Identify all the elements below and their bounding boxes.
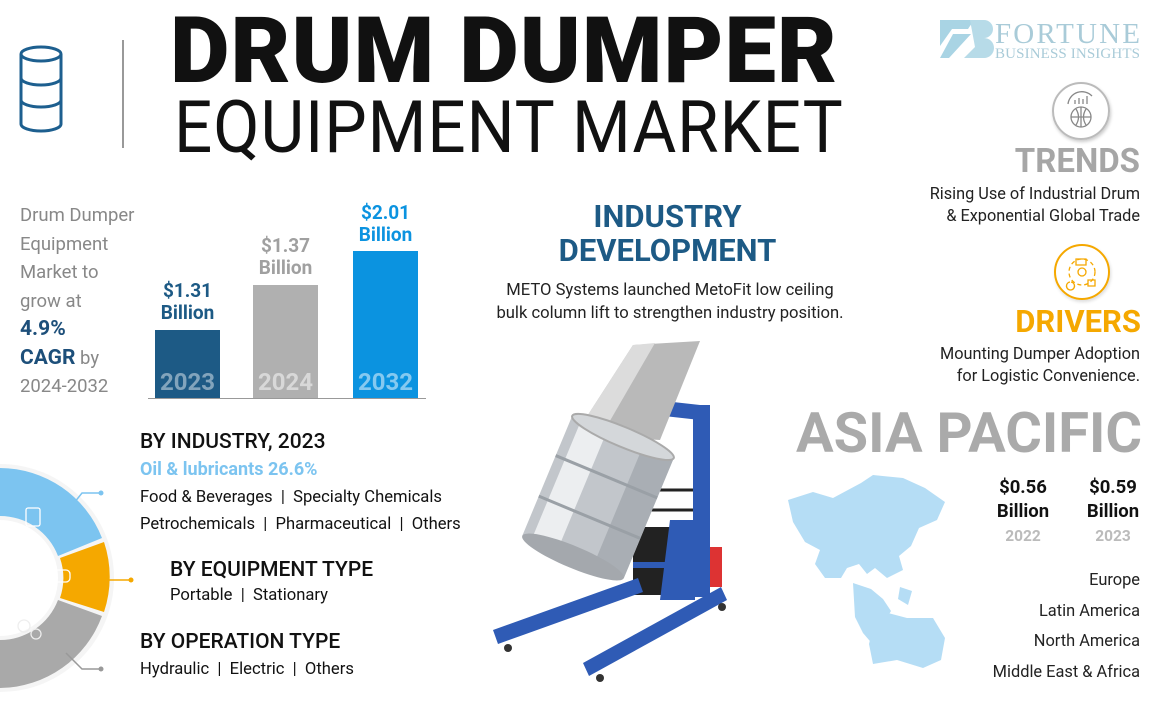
text: CAGR: 2024-2032 [20,375,108,397]
logo [940,18,1140,62]
text: drivers: Mounting Dumper Adoption [940,344,1140,363]
bar chart: 2023 [160,368,215,396]
text: drivers: for Logistic Convenience. [957,366,1140,385]
segment: by operation type: BY OPERATION TYPE [140,630,340,654]
text: CAGR: CAGR by [20,346,99,370]
region list: North America [1034,632,1140,651]
icon: drivers [1054,244,1110,300]
segment: by equipment type: Portable | Stationary [170,586,328,605]
text: industry development: METO Systems launched MetoFit low ceiling [506,281,834,300]
region list: Latin America [1039,602,1140,620]
bar chart: Billion [161,301,214,324]
text: CAGR: Equipment [20,232,108,254]
title: DRUM DUMPER [170,0,838,105]
region list: Europe [1089,571,1140,590]
title [170,0,844,170]
icon: drum [20,46,62,132]
stat: 2023 [1087,476,1139,545]
heading: asia pacific: ASIA PACIFIC [796,400,1142,466]
stat: 2023: $0.59 [1089,476,1137,498]
heading: drivers: DRIVERS [1015,303,1141,340]
image: drum dumper [493,341,727,682]
map: asia pacific [788,475,945,668]
bar chart: $1.31 [163,279,212,302]
title: EQUIPMENT MARKET [174,85,844,170]
stat: 2022: Billion [997,500,1049,522]
segment: by industry: Oil & lubricants 26.6% [140,459,317,480]
text: CAGR [20,204,134,397]
stat: 2022 [997,476,1049,545]
text: CAGR: Drum Dumper [20,204,134,226]
bar chart: 2032 [358,368,413,396]
heading: trends: TRENDS [1015,142,1140,181]
text: industry development: bulk column lift to strengthen industry position. [496,304,844,323]
segment: by equipment type [170,558,373,605]
segment: by operation type: Hydraulic | Electric | Others [140,660,354,679]
icon: trends [1052,82,1110,140]
legs [493,578,643,644]
logo: FORTUNE [995,18,1140,50]
connector lines [66,490,134,672]
stat: 2022: $0.56 [999,476,1047,498]
heading: industry development [559,198,776,269]
segment: by operation type [140,630,354,679]
text: trends: Rising Use of Industrial Drum [930,184,1140,203]
stat: 2023: Billion [1087,500,1139,522]
text: industry development [496,281,844,323]
text: CAGR: grow at [20,290,82,312]
text: trends [930,184,1140,225]
drum [518,407,678,588]
stat: 2022: 2022 [1005,527,1041,545]
region list [993,571,1140,682]
donut chart [0,464,114,692]
text: drivers [940,344,1140,385]
bar chart: $1.37 [261,234,310,257]
bar chart [148,201,426,399]
text: trends: & Exponential Global Trade [946,206,1140,225]
heading: industry development: DEVELOPMENT [559,232,776,269]
segment: by industry: Petrochemicals | Pharmaceutical | Others [140,515,461,534]
bar chart: Billion [259,256,312,279]
segment: by industry [140,430,461,534]
stat: 2023: 2023 [1095,527,1131,545]
region list: Middle East & Africa [993,662,1140,682]
bar chart: 2024 [258,368,313,396]
logo: BUSINESS INSIGHTS [995,46,1140,62]
heading: industry development: INDUSTRY [593,198,742,235]
segment: by industry: Food & Beverages | Specialty Chemicals [140,488,442,507]
segment: by industry: BY INDUSTRY, 2023 [140,430,326,454]
text: CAGR: 4.9% [20,317,66,341]
bar chart: $2.01 [361,201,410,224]
column + frame [655,400,700,420]
text: CAGR: Market to [20,261,99,283]
segment: by equipment type: BY EQUIPMENT TYPE [170,558,373,582]
bar chart: Billion [359,223,412,246]
chute [575,341,700,440]
